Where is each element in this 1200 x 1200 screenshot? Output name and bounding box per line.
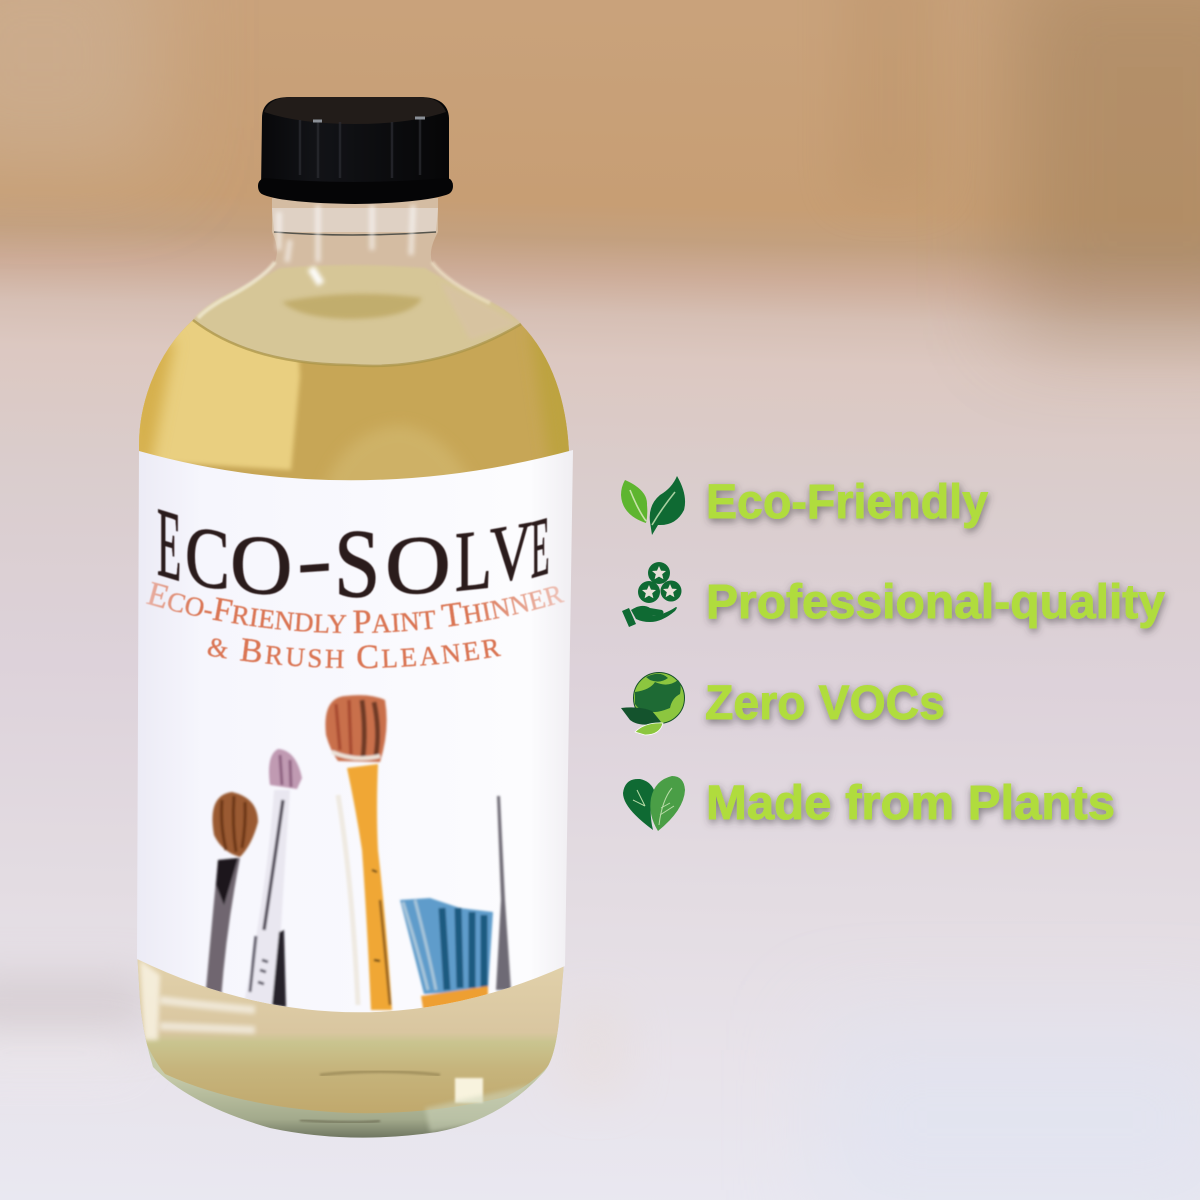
text: Eco-Friendly: Eco-Friendly [706,476,988,529]
feature: zero VOCs [621,672,945,735]
product name: Eco-Solve: C [185,506,230,609]
product name: Eco-Solve: E [157,487,181,604]
brush: brown [212,792,258,857]
brush: orange [325,695,387,762]
product name: Eco-Solve: O [230,517,292,614]
product subtitle line 1: ECO-FRIENDLY PAINT THINNER [146,581,565,634]
product name: Eco-Solve: L [455,512,492,611]
icon: leaf heart [623,776,685,831]
product name: Eco-Solve: - [297,512,332,608]
text: Made from Plants: Made from Plants [706,777,1115,830]
product name: Eco-Solve: V [490,505,532,601]
product bottle [137,97,573,1138]
feature: professional-quality [622,562,1165,629]
liquid body [139,319,569,480]
text: Zero VOCs: Zero VOCs [705,677,945,730]
product name: Eco-Solve: O [385,518,451,612]
product subtitle line 2: & BRUSH CLEANER [207,637,502,670]
product name: Eco-Solve [157,487,549,618]
feature: made from plants [623,776,1115,831]
icon: hand holding stars [622,562,682,627]
icon: two leaves [621,476,685,535]
glass base with liquid [138,959,564,1138]
brush: thin [496,796,511,990]
brush: blue fan [400,898,493,1014]
product name: Eco-Solve: S [334,509,380,618]
brush: purple [269,749,302,789]
product name: Eco-Solve: E [531,497,549,597]
icon: globe with leaves [621,672,684,735]
paint brushes photo [205,695,511,1014]
feature: eco-friendly [621,476,988,535]
feature list [621,476,1165,831]
label [137,450,573,1012]
text: Professional-quality: Professional-quality [706,576,1165,629]
glass neck and shoulder [193,198,521,366]
cap [258,97,453,204]
